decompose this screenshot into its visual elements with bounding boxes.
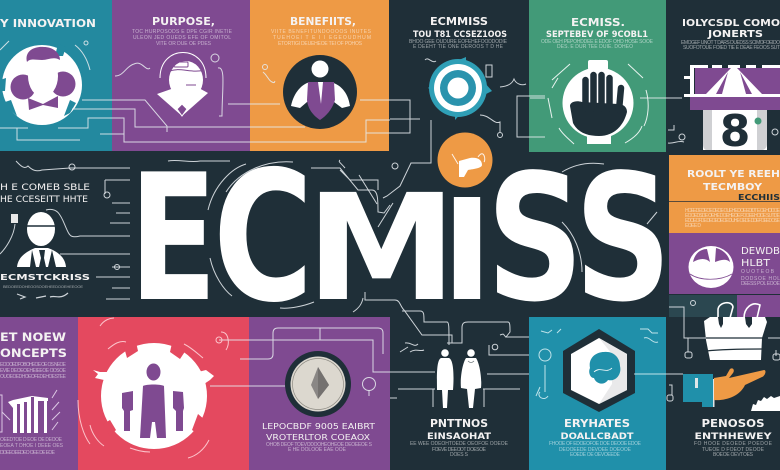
text: figures heading: EINSAOHAT — [427, 432, 492, 442]
text: coin caption: LEPOCBDF 9005 EAIBRT — [262, 422, 376, 431]
heading: ecmiss green: SEPTEBEV OF 9COBL1 — [546, 30, 648, 40]
panel: green — [529, 0, 666, 152]
heading: ecmiss green: ECMISS. — [571, 17, 625, 29]
icon: business person — [11, 212, 66, 267]
panel: tent and eight — [668, 18, 780, 157]
icon: shell — [688, 246, 734, 288]
icon: pillars chart — [0, 390, 60, 433]
title: ECMISS: E — [129, 137, 217, 341]
text: concepts caption: DDEEOEEDEO OEE DE EOE — [0, 450, 56, 456]
text: right bottom heading: ENTHHEWEY — [694, 432, 772, 442]
title: ECMISS: I — [441, 170, 493, 333]
panel: purple coin — [210, 317, 390, 470]
heading: ecmiss green: ODE OEH PEPOHDDEE E EDOF OHD HOSE SOOE — [541, 39, 654, 45]
panel: purpose — [112, 0, 250, 151]
text: purpose body: ULEON JED OUEDS EFE OF OMITOL — [133, 35, 231, 41]
icon: person in gear — [93, 342, 214, 449]
circuit lines: bottom — [365, 292, 683, 407]
text: right orange body — [685, 208, 780, 229]
text: right orange body: EDOEOFDE DEOEOEOE DUHE OEDE DDEFOEEDOSE — [685, 218, 780, 224]
panel: lower right tabs — [669, 295, 780, 317]
text: right purple: OUOTEOB — [741, 269, 775, 275]
panel: new concepts — [0, 317, 78, 470]
panel: ecmiss tour — [409, 16, 526, 138]
title: ECMISS: C — [213, 133, 313, 342]
text: figures heading: PNTTNOS — [430, 418, 488, 430]
text: coin caption: OHOB DEOF TOEVODOOHEOHEOE DEOEEOE S — [266, 442, 373, 448]
heading: involved components: SUOFOTOUE FOIED TIE E DEAE FEOOS SUT — [683, 45, 780, 51]
heading: left: H E COMEB SBLE — [0, 182, 90, 192]
heading: ecmiss green: DES. E DUR TEE DUIE. DOHEO — [557, 44, 633, 50]
text: right bottom heading: PENOSOS — [702, 418, 764, 430]
text: figures heading: FOEVE DEEODT DOESOE — [432, 447, 487, 453]
heading: new concepts: OUOEOEDHOEOFEDEHOESTEE — [0, 374, 67, 380]
text: teal heading: FHOOE OF EDOEOFOE DOE DEOOE EDOE — [549, 441, 642, 447]
icon: hexagon brain — [563, 329, 635, 412]
heading: involved components: JONERTS — [707, 29, 763, 40]
title: ECMISS: S — [486, 137, 584, 340]
text: benefits body: ETORTIGI DEUEHEOE TEI OF POHOS — [278, 41, 363, 47]
text: purpose body — [132, 29, 233, 47]
title: ECMISS — [129, 133, 672, 342]
icon: two figures — [437, 349, 481, 408]
text: benefits body — [271, 29, 372, 47]
panel: red — [78, 317, 249, 470]
icon: coin — [285, 351, 351, 417]
text: figures heading: EE WEE ODEOHTOEDE OEOFOE OOEOE — [410, 441, 509, 447]
text: right orange body: HOEEDE DEOE DEOE OUEHE DOE EDIDT E OEHODOE — [685, 208, 780, 214]
heading: innovation: Y INNOVATION — [0, 17, 96, 30]
icon: hand with cuff — [683, 368, 765, 407]
text: figures heading — [410, 418, 509, 458]
heading: purpose: PURPOSE, — [152, 15, 215, 28]
text: concepts caption: OEEDTOE D EOE OE DEOOE — [0, 437, 63, 443]
heading: right orange — [687, 169, 780, 202]
panel: innovation — [0, 0, 112, 151]
icon: gear — [751, 396, 780, 411]
icon: head with collar — [115, 52, 223, 116]
text: purpose body: VITE OR DUE OE PDES — [156, 41, 212, 47]
icon: shopping bag — [704, 303, 768, 360]
panel: purple right — [669, 233, 780, 294]
panel: teal hexagon — [529, 317, 666, 470]
text: right purple — [741, 246, 780, 287]
text: coin caption: VROTERLTOR COEAOX — [266, 433, 370, 442]
text: teal heading — [549, 418, 642, 458]
text: right purple: DODSOE HOL — [741, 276, 780, 282]
icon: hand — [548, 60, 648, 144]
icon: person in circle — [283, 55, 357, 129]
heading: ecmiss green — [541, 17, 654, 50]
heading: right orange: TECMBOY — [703, 182, 763, 193]
heading: ecmiss tour: TOU T81 CCSEZ1OOS — [413, 30, 507, 40]
heading: new concepts: EOOOEDFOBOHEOE OE OS NEOE — [0, 362, 67, 368]
heading: ecmiss tour: ECMMISS — [430, 16, 488, 28]
panel: figures — [410, 349, 509, 458]
heading: left: HE CCESEITT HHTE — [0, 194, 88, 204]
text: right bottom heading: TUEOE D FOEOT DEOOE — [702, 447, 765, 453]
panel: orange right — [669, 155, 780, 233]
text: concepts caption — [0, 437, 64, 456]
heading: left — [0, 182, 90, 204]
text: right bottom heading — [694, 418, 773, 458]
text: teal heading: EOEDE OE OEVOEEDE — [570, 452, 621, 458]
text: right orange body: EOEE D — [685, 223, 701, 229]
circuit lines: top — [0, 96, 682, 213]
text: purpose body: TOC HURPOSODS E DPE CGIR INETIE — [132, 29, 233, 35]
icon: orange circle dot — [438, 132, 492, 188]
heading: right orange: ROOLT YE REEH — [687, 169, 780, 180]
text: teal heading: ERYHATES — [564, 418, 630, 430]
heading: involved components: IOLYCSDL COMO — [682, 18, 780, 29]
text: right bottom heading: FO HOOE DEOEDE POEDOE — [694, 441, 773, 447]
panel: left middle with person — [0, 161, 130, 299]
text: right orange body: EOOEDSDE OEHE DOEHEOE FOOEEHODE SUTDE — [685, 213, 780, 219]
panel: benefits — [250, 0, 389, 151]
heading: involved components: EMOGEF UNOT T DARS DUEDSS SCIMOFOEIDO — [681, 40, 780, 46]
text: figures heading: DOES S — [450, 452, 469, 458]
icon: ring — [428, 57, 492, 120]
text: concepts caption: EOEA T DHOE I DEEE OES — [0, 443, 64, 449]
text: benefits body: TUEHOEI T E I I EGEOUDHUM — [273, 35, 371, 41]
text: benefits body: VIITE BENEFITUNDOOOOS INUTES — [271, 29, 372, 35]
text: right purple: HLBT — [741, 258, 771, 269]
heading: new concepts: ET NOEW — [0, 330, 66, 344]
decorative arcs around title — [168, 160, 657, 312]
heading: new concepts: EVIE DEOEOEHEIEEOE ODSOE — [0, 368, 67, 374]
text: right purple: DEESS POL EOOE — [741, 281, 780, 287]
text: teal heading: DOALLCBADT — [560, 432, 634, 442]
heading: new concepts — [0, 330, 67, 380]
text: coin caption — [262, 422, 376, 453]
text: caption: BEDOEEDOHEOOSOOEHEEDOOEHEEOOE — [3, 284, 83, 289]
text: teal heading: DEOOEEDE DEVOEE DOEOOE — [559, 447, 632, 453]
heading: ecmiss tour — [409, 16, 508, 50]
heading: ecmiss tour: BHOO GEE OUDURE EOFEHEFOODDODIE — [409, 39, 508, 45]
heading: involved components — [681, 18, 780, 51]
title: ECMISS: M — [306, 163, 457, 334]
heading: right orange: ECCHIIS — [738, 193, 780, 202]
heading: new concepts: ONCEPTS — [0, 346, 67, 360]
heading: ecmiss tour: E DEEHT TIE ONE DEROOS T D HE — [413, 44, 504, 50]
title: ECMISS: S — [574, 137, 672, 340]
text: right purple: DEWDB — [741, 246, 780, 257]
text: coin caption: E HE DOLOOE EAE OOE — [288, 447, 347, 453]
icon: tent with number eight: 8 — [720, 106, 750, 157]
icon: woman portrait — [0, 44, 82, 125]
heading: benefits: BENEFIITS, — [290, 15, 356, 28]
text: right bottom heading: BOEOE OEVTOES — [713, 452, 754, 458]
label: ecmsterkiss: ECMSTCKRISS — [0, 272, 90, 282]
